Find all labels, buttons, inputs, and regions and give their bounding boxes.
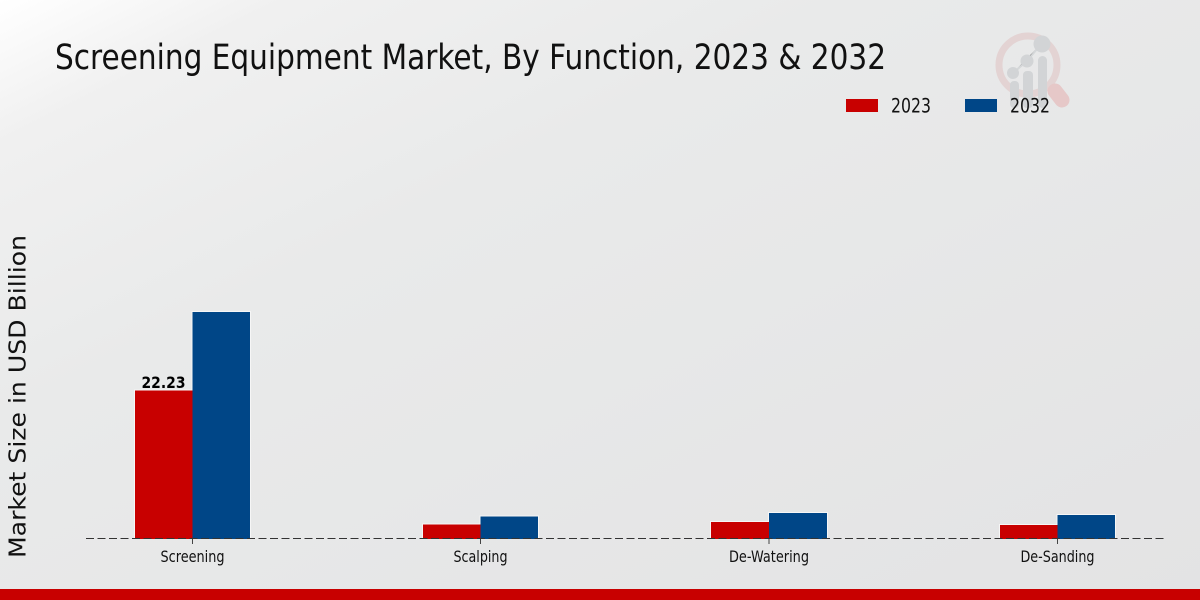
legend: 2032 [1010,94,1050,118]
icon: watermark logo [999,36,1062,108]
group: Scalping [422,516,538,566]
legend: 2023 [891,94,931,118]
y-axis title: Market Size in USD Billion [6,235,32,558]
group: Screening: Screening [160,547,224,566]
group: Scalping: Scalping [454,547,508,566]
group: De-Watering [710,512,828,566]
group: Screening [134,312,250,566]
title: Screening Equipment Market, By Function, 2023 & 2032 [55,38,886,78]
group: De-Watering: De-Watering [729,547,809,566]
group: De-Sanding: De-Sanding [1020,547,1094,566]
legend [846,94,1050,118]
footer bar [0,589,1200,600]
group: De-Sanding [1000,514,1116,566]
group: Screening: 22.23 [142,373,186,392]
bar chart [86,312,1164,566]
